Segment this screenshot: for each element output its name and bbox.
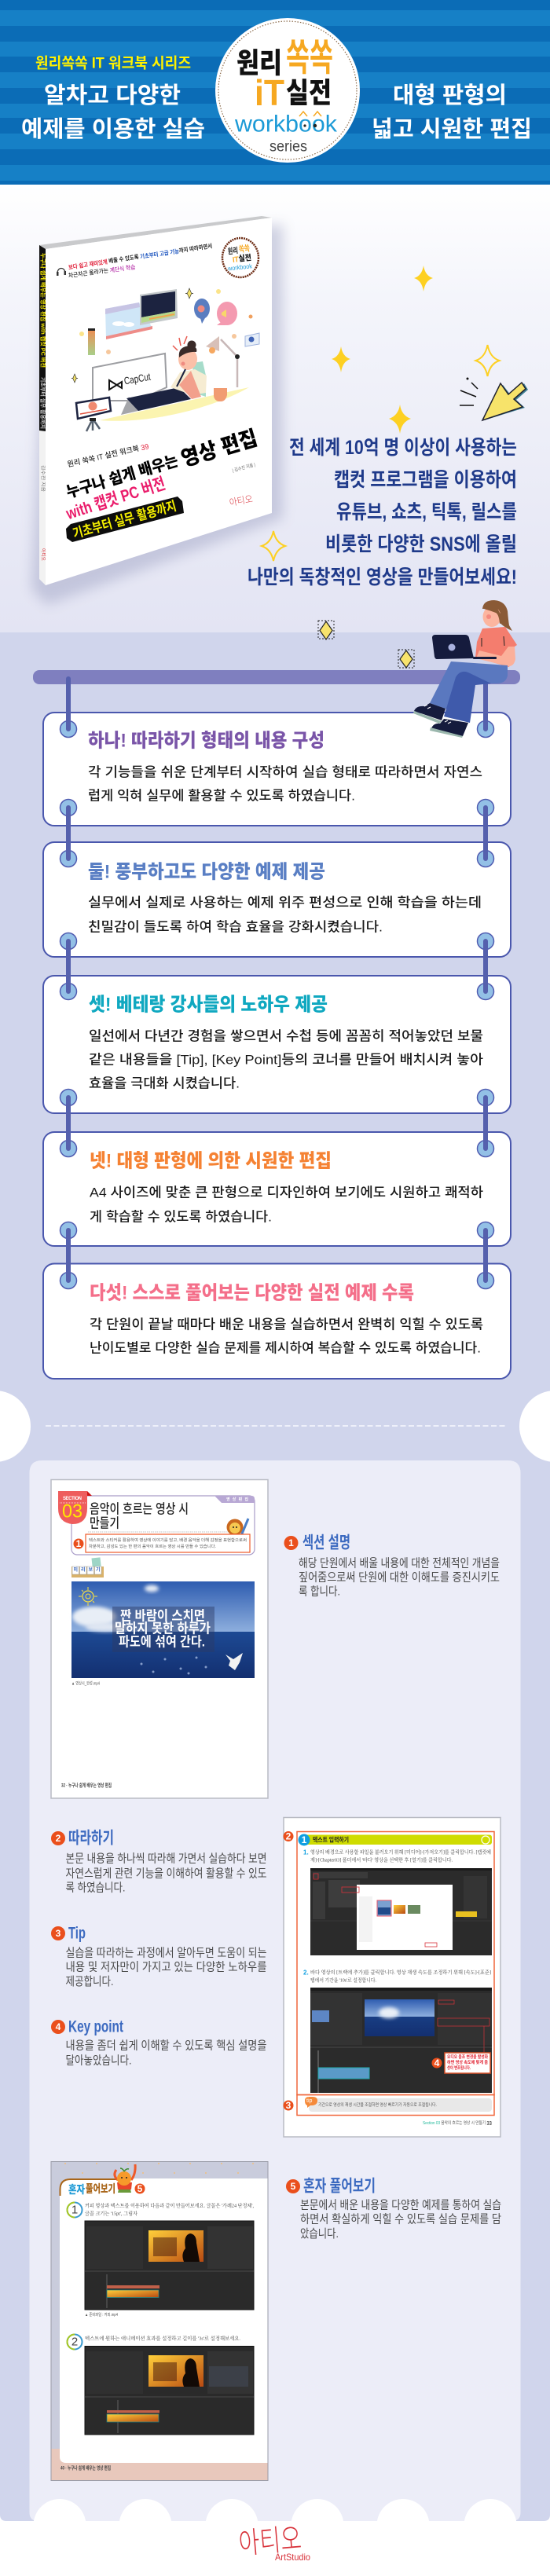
icon: click cursor: [460, 377, 528, 420]
panel: book explanation: [30, 1460, 520, 2521]
explanation 2: follow along: 자연스럽게 관련 기능을 이해하여 활용할 수 있도: [66, 1867, 267, 1881]
publisher logo: ArtStudio: [275, 2552, 310, 2563]
card 1: [43, 713, 511, 826]
card 1 title: 하나! 따라하기 형태의 내용 구성: [88, 731, 324, 751]
publisher logo: 아티오: [237, 2523, 303, 2561]
tip bar: [305, 2097, 492, 2112]
cover title: 누구나 쉽게 배우는 영상 편집: [64, 426, 260, 504]
card 5 title: 다섯! 스스로 풀어보는 다양한 실전 예제 수록: [90, 1282, 414, 1304]
series label: 원리쏙쏙 IT 워크북 시리즈: [35, 55, 191, 72]
exercise 1 number: 1: [72, 2203, 78, 2217]
marker 1 on page: [74, 1538, 83, 1549]
explanation 5: solve alone: 5: [291, 2181, 296, 2192]
intro text: 비롯한 다양한 SNS에 올릴: [325, 533, 517, 555]
section badge: [58, 1491, 92, 1524]
book mockup: [31, 216, 283, 605]
card 2: [43, 842, 511, 957]
cover illustration: CapCut: [123, 371, 152, 387]
cover tagline: [57, 242, 213, 279]
intro text: 캡컷 프로그램을 이용하여: [334, 469, 517, 491]
card 3 body: [89, 1029, 483, 1090]
card 2 body: 친밀감이 들도록 하여 학습 효율을 강화시켰습니다.: [88, 919, 383, 935]
section frame: [72, 1496, 255, 1555]
cover illustration: [72, 288, 259, 431]
screenshot: editor timeline: 오디오 음조 변경을 활성화: [447, 2054, 488, 2060]
exercise 1 caption: ▲ 준비파일 : 커피.mp4: [85, 2312, 118, 2318]
preview tabs: 미: [74, 1566, 78, 1573]
explanation 5: solve alone: 혼자 풀어보기: [303, 2178, 376, 2195]
page sample 1: section intro: [51, 1480, 268, 1798]
step heading: 텍스트 입력하기: [313, 1835, 349, 1843]
exercise 1 text: [85, 2201, 254, 2217]
practice heading: [68, 2182, 116, 2196]
explanation 5: solve alone: 하면서 확실하게 익힐 수 있도록 실습 문제를 담: [300, 2212, 501, 2226]
marker 2: [283, 1830, 294, 1841]
explanation 3: tip: 실습을 따라하는 과정에서 알아두면 도움이 되는: [66, 1947, 267, 1959]
screenshot: editor timeline: 성이 변조됩니다.: [447, 2065, 471, 2071]
marker 1 on page: 1: [76, 1538, 82, 1549]
explanation 3: tip: 3: [56, 1928, 61, 1939]
preview tabs: 리: [81, 1566, 86, 1573]
card 2 title: 둘! 풍부하고도 다양한 예제 제공: [88, 861, 325, 883]
step 2 text: 바다 영상의 [트랙에 추가]를 클릭합니다. 영상 재생 속도를 조정하기 위해 [속도]-[표준]: [310, 1969, 491, 1975]
card 2 body: [88, 896, 482, 935]
card 1 body: 럽게 익혀 실무에 활용할 수 있도록 하였습니다.: [88, 789, 355, 803]
intro text: [248, 437, 517, 588]
step heading: [299, 1834, 492, 1846]
decorative selection sparkles: [318, 621, 414, 668]
screenshot: file dialog: [310, 1868, 492, 1955]
step 2 text: 탭에서 기간을 '10s'로 설정합니다.: [310, 1977, 376, 1983]
cover badge: workbook: [227, 262, 253, 273]
intro background: [0, 185, 550, 632]
spine text: 기초부터 실무 활용까지: [39, 377, 47, 429]
step 1 text: [303, 1848, 491, 1863]
step heading: 1: [302, 1834, 307, 1845]
section title: [90, 1502, 189, 1530]
page footer: Section 03 음악이 흐르는 영상 시 만들기 33: [423, 2120, 492, 2126]
card 3 body: 같은 내용들을 [Tip], [Key Point]등의 코너를 만들어 배치시켜 놓아: [89, 1053, 483, 1067]
card 4 body: 게 학습할 수 있도록 하였습니다.: [90, 1210, 272, 1224]
sea photo preview: 파도에 섞여 간다.: [119, 1634, 205, 1650]
explanation 4: key point: Key point: [68, 2017, 123, 2036]
section summary box: 차분하고, 감성도 있는 한 편의 음악이 흐르는 영상 시를 만들 수 있습니다.: [89, 1544, 216, 1549]
practice heading: 혼자: [68, 2183, 85, 2196]
section summary box: 텍스트와 스티커를 활용하여 영상에 이야기를 담고, 배경 음악을 더해 감정을 표현함으로써: [89, 1537, 247, 1543]
right headline: 대형 판형의: [393, 82, 507, 108]
section title: 음악이 흐르는 영상 시: [90, 1502, 189, 1516]
right headline: [372, 82, 532, 142]
card 2 body: 실무에서 실제로 사용하는 예제 위주 편성으로 인해 학습을 하는데: [88, 896, 482, 910]
series logo badge: 실전: [286, 77, 332, 108]
card 3 title: 셋! 베테랑 강사들의 노하우 제공: [89, 995, 328, 1015]
explanation 4: key point: 4: [56, 2021, 61, 2032]
tip bar: 기간으로 영상의 재생 시간을 조절하면 영상 빠르기가 자동으로 조절됩니다.: [318, 2101, 437, 2108]
exercise 2 number: [68, 2335, 82, 2350]
marker 3: [283, 2100, 294, 2111]
step 2 text: [303, 1969, 491, 1983]
explanation 4: key point: [51, 2017, 267, 2068]
exercise 1 text: 커피 영상과 텍스트를 이용하여 다음과 같이 만들어보세요. 글꼴은 '가례24 단정체',: [85, 2201, 254, 2209]
exercise 1 number: [68, 2203, 82, 2217]
right headline: 넓고 시원한 편집: [372, 116, 532, 142]
cover badge: IT실전: [232, 252, 251, 264]
sea photo preview: 말하지 못한 하루가: [115, 1621, 211, 1636]
card 3 body: 일선에서 다년간 경험을 쌓으면서 수첩 등에 꼼꼼히 적어놓았던 보물: [89, 1029, 483, 1043]
section summary box: [86, 1534, 250, 1552]
explanation 1: section description: 1: [288, 1537, 294, 1548]
header banner: [0, 0, 550, 185]
section frame: 영 상 편 집: [226, 1497, 248, 1502]
section badge: SECTION: [63, 1497, 82, 1501]
card 4: [43, 1132, 511, 1246]
marker 5 on page: [135, 2183, 145, 2194]
intro text: 유튜브, 쇼츠, 틱톡, 릴스를: [336, 501, 517, 523]
series logo badge: 쏙쏙: [286, 38, 333, 79]
feature band background: [0, 632, 550, 2521]
series logo badge: 원리: [236, 47, 282, 79]
spine text: 김수진 지음: [40, 465, 46, 492]
explanation 1: section description: 섹션 설명: [302, 1534, 350, 1552]
explanation 1: section description: 해당 단원에서 배울 내용에 대한 전체적인 개념을: [299, 1557, 500, 1570]
cover title: [64, 426, 260, 542]
explanation 4: key point: 내용을 좀더 쉽게 이해할 수 있도록 핵심 설명을: [66, 2039, 267, 2052]
page footer: 32 · 누구나 쉽게 배우는 영상 편집: [61, 1782, 112, 1788]
card 3 body: 효율을 극대화 시켰습니다.: [89, 1076, 240, 1090]
screenshot: editor timeline: 4: [434, 2058, 440, 2068]
cover badge: [222, 238, 258, 277]
series logo badge: [215, 18, 360, 163]
explanation 2: follow along: 2: [56, 1833, 61, 1844]
preview tabs: 보: [88, 1567, 93, 1573]
explanation 2: follow along: 따라하기: [68, 1829, 114, 1848]
spine text: 누구나 쉽게 배우는 영상 편집 with 캡컷 PC 버전: [39, 253, 47, 368]
section title: 만들기: [90, 1516, 119, 1530]
section badge: 03: [62, 1501, 82, 1523]
sparkles: [262, 266, 500, 561]
step 1 text: 제]-[Chapter03] 폴더에서 '바다' 영상을 선택한 후 [열기]를 클릭합니다.: [310, 1856, 453, 1863]
page footer: 40 · 누구나 쉽게 배우는 영상 편집: [60, 2464, 111, 2472]
cover title: 원리 쏙쏙 IT 실전 워크북 39: [67, 442, 150, 469]
card 5 body: 난이도별로 다양한 실습 문제를 제시하여 복습할 수 있도록 하였습니다.: [90, 1340, 481, 1356]
cover title: 아티오: [229, 493, 254, 508]
intro text: 전 세계 10억 명 이상이 사용하는: [289, 437, 517, 459]
series logo badge: series: [270, 138, 307, 156]
sea photo preview: 짠 바람이 스치면: [120, 1609, 205, 1623]
marker 3: 3: [286, 2100, 292, 2111]
series logo badge: iT: [255, 72, 284, 113]
card 1 body: 각 기능들을 쉬운 단계부터 시작하여 실습 형태로 따라하면서 자연스: [88, 765, 482, 779]
explanation 2: follow along: 록 하였습니다.: [66, 1881, 126, 1895]
preview tabs: 기: [96, 1566, 101, 1573]
card 3: [43, 976, 511, 1113]
card 5: [43, 1263, 511, 1379]
photo caption: ▲ 영상시_완성.mp4: [72, 1680, 100, 1686]
explanation 3: tip: [51, 1925, 267, 1988]
explanation 4: key point: 달아놓았습니다.: [66, 2054, 132, 2068]
exercise 1 text: 글꼴 크기는 '15pt', 그림자: [85, 2209, 138, 2217]
sea photo preview: [72, 1581, 255, 1678]
exercise 2 text: 텍스트에 원하는 애니메이션 효과를 설정하고 길이를 '3s'로 설정해보세요.: [85, 2335, 240, 2341]
explanation 1: section description: [284, 1534, 500, 1598]
explanation 5: solve alone: 본문에서 배운 내용을 다양한 예제를 통하여 실습: [300, 2198, 501, 2212]
page sample 2: follow-along page: [283, 1818, 500, 2137]
series logo badge: workbook: [234, 112, 338, 137]
cover title: | 김수진 지음 |: [232, 461, 256, 474]
card 4 body: [90, 1185, 483, 1224]
left headline: 알차고 다양한: [44, 82, 181, 108]
preview tabs: [72, 1557, 104, 1577]
screenshot: exercise 1: [85, 2221, 254, 2310]
illustration: woman with laptop: [413, 600, 517, 738]
explanation 5: solve alone: 았습니다.: [300, 2227, 339, 2241]
step 1 text: 영상의 배경으로 사용할 파일을 불러오기 위해 [미디어]-[가져오기]를 클릭합니다. [캡컷예: [310, 1848, 491, 1856]
screenshot: editor timeline: [310, 1988, 492, 2093]
explanation 2: follow along: [51, 1829, 267, 1895]
tip bar: tip: [306, 2098, 313, 2104]
cover title: with 캡컷 PC 버전: [64, 475, 167, 523]
explanation 3: tip: Tip: [68, 1925, 86, 1942]
screenshot: exercise 2: [85, 2346, 254, 2435]
spine text: [39, 253, 47, 561]
explanation 3: tip: 제공합니다.: [66, 1975, 113, 1988]
card 4 title: 넷! 대형 판형에 의한 시원한 편집: [90, 1150, 332, 1172]
left headline: 예제를 이용한 실습: [21, 116, 205, 142]
binder rings and rods: [60, 679, 493, 1288]
left headline: [21, 82, 205, 142]
screenshot: editor timeline: 하면 영상 속도에 맞게 음: [447, 2059, 488, 2065]
marker 2: 2: [286, 1830, 292, 1841]
explanation 2: follow along: 본문 내용을 하나씩 따라해 가면서 실습하다 보면: [66, 1852, 267, 1865]
practice heading: 풀어보기: [86, 2182, 116, 2195]
scalloped bottom edge: [0, 2499, 550, 2576]
step 2 text: 2.: [303, 1969, 309, 1977]
icon: mascot: [115, 2164, 135, 2193]
hanging bar: [33, 670, 520, 684]
explanation 1: section description: 짚어줌으로써 단원에 대한 이해도를 증진시키도: [299, 1571, 500, 1584]
explanation 5: solve alone: [286, 2178, 501, 2241]
explanation 3: tip: 내용 및 저자만이 가지고 있는 다양한 노하우를: [66, 1961, 267, 1973]
icon: lion mascot: [226, 1519, 248, 1537]
marker 5 on page: 5: [138, 2183, 143, 2194]
cover badge: 원리: [227, 245, 239, 256]
card 5 body: 각 단원이 끝날 때마다 배운 내용을 실습하면서 완벽히 익힐 수 있도록: [90, 1317, 483, 1332]
step 1 text: 1.: [303, 1849, 309, 1856]
divider: side notches and dashed line: [0, 1391, 550, 1462]
cover title: 기초부터 실무 활용까지: [71, 499, 178, 541]
card 4 body: A4 사이즈에 맞춘 큰 판형으로 디자인하여 보기에도 시원하고 쾌적하: [90, 1185, 483, 1200]
cover tagline: 보다 쉽고 재미있게 배울 수 있도록 기초부터 고급 기능까지 따라하면서: [68, 242, 213, 270]
card 1 body: [88, 765, 482, 803]
explanation 1: section description: 록 합니다.: [299, 1585, 340, 1598]
exercise 2 number: 2: [72, 2335, 78, 2349]
cover badge: 쏙쏙: [238, 244, 251, 255]
page sample 3: practice page: [51, 2162, 268, 2481]
card 5 body: [90, 1317, 483, 1356]
spine text: 아티오: [40, 548, 46, 561]
cover tagline: 차근차근 올라가는 계단식 학습: [68, 262, 136, 279]
